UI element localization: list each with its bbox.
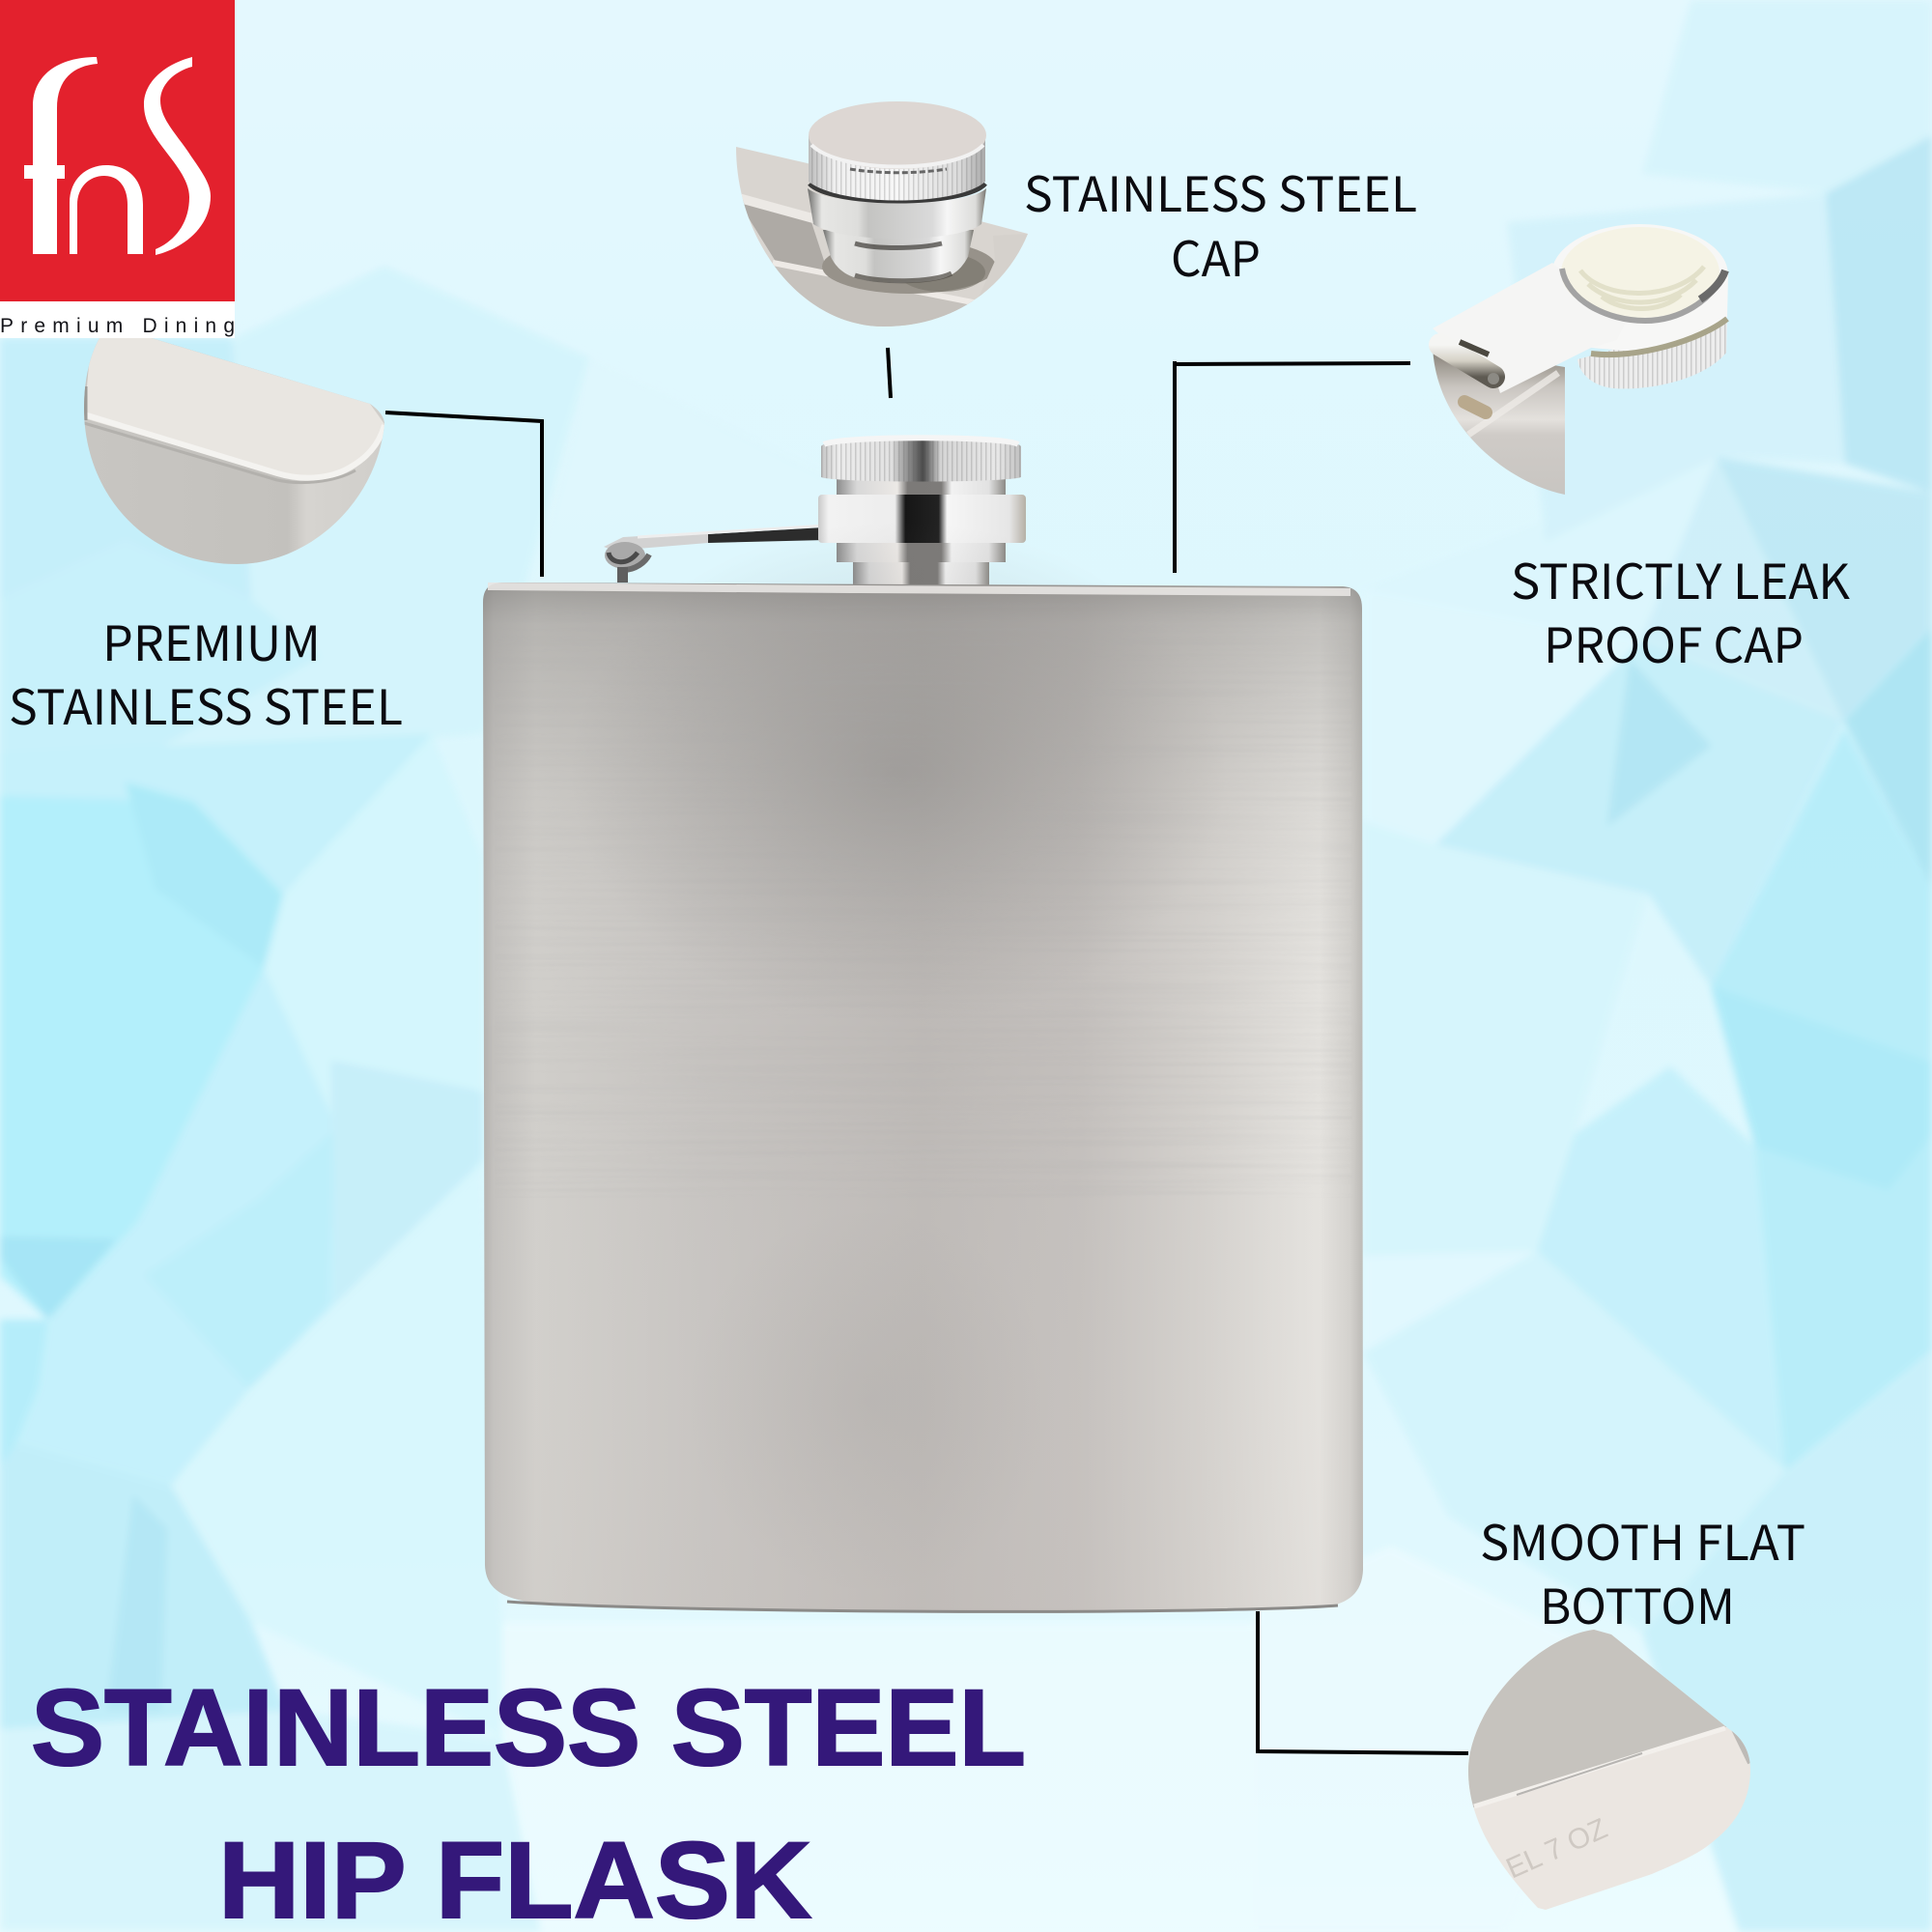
- title: stainless steel hip flask: [31, 1667, 1026, 1932]
- logo letterforms: f n S: [24, 57, 211, 255]
- callout image: stainless steel cap close-up: [736, 101, 1028, 327]
- label: stainless steel cap: CAP: [1171, 221, 1261, 291]
- label: smooth flat bottom: [1480, 1505, 1805, 1638]
- thread interior: [1561, 227, 1719, 318]
- cap ring: [808, 188, 986, 239]
- callout image: flask bottom with engraving: [1468, 1630, 1750, 1910]
- hinge arm: [1433, 263, 1625, 393]
- logo tagline: Premium Dining: [0, 315, 235, 337]
- flask shoulder piece: [1433, 345, 1565, 495]
- label: strictly leak proof cap: [1511, 544, 1851, 677]
- title: stainless steel hip flask: STAINLESS STEEL: [31, 1667, 1026, 1788]
- label: stainless steel cap: STAINLESS STEEL: [1024, 156, 1417, 226]
- engraved capacity text: EL 7 OZ: [1501, 1812, 1612, 1885]
- callout image: premium stainless steel corner: [77, 333, 396, 570]
- label: premium stainless steel: [9, 606, 403, 739]
- logo: fnS Premium Dining: [0, 0, 235, 338]
- label: premium stainless steel: STAINLESS STEEL: [9, 669, 403, 739]
- connector line: premium steel: [385, 412, 542, 577]
- flask hinge arm: [604, 526, 826, 582]
- label: smooth flat bottom: SMOOTH FLAT: [1480, 1505, 1805, 1575]
- knurled lower rim: [1577, 319, 1727, 388]
- hinge barrel: [1440, 345, 1493, 377]
- cap neck: [823, 230, 974, 283]
- connector line: smooth flat bottom: [1258, 1611, 1468, 1753]
- flask body: [483, 522, 1363, 1611]
- label: premium stainless steel: PREMIUM: [102, 606, 321, 675]
- label: strictly leak proof cap: STRICTLY LEAK: [1511, 544, 1851, 613]
- label: strictly leak proof cap: PROOF CAP: [1544, 608, 1804, 677]
- callout image: leak proof cap open: [1433, 224, 1728, 495]
- label: smooth flat bottom: BOTTOM: [1540, 1569, 1735, 1638]
- flask cap: [818, 437, 1026, 587]
- label: stainless steel cap: [1024, 156, 1417, 291]
- knurled cap: [809, 135, 985, 201]
- connector tick: cap: [888, 348, 891, 398]
- connector line: leak proof cap: [1175, 361, 1410, 573]
- white cap body: [1551, 224, 1728, 351]
